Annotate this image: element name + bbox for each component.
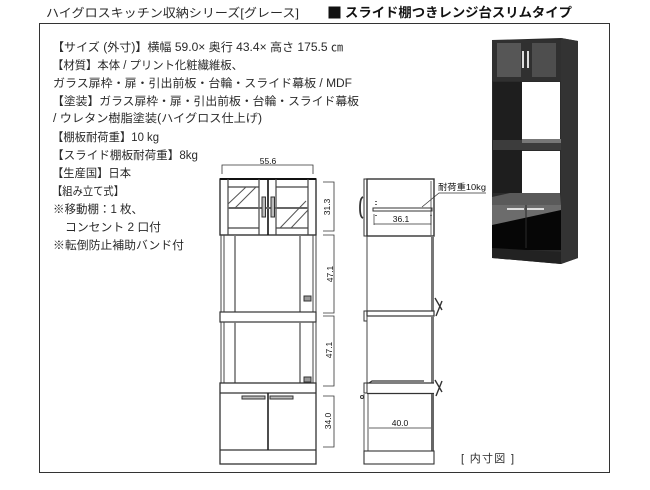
depth dimension [369, 418, 431, 428]
specification text: 【塗装】ガラス扉枠・扉・引出前板・台輪・スライド幕板 [52, 94, 359, 108]
specification text: 【材質】本体 / プリント化粧繊維板、 [52, 58, 243, 72]
width dimension: 55.6 [260, 156, 277, 166]
specification text: ガラス扉枠・扉・引出前板・台輪・スライド幕板 / MDF [53, 76, 352, 90]
series heading: ハイグロスキッチン収納シリーズ[グレース] [46, 5, 299, 20]
front elevation drawing [220, 156, 335, 464]
glossy lower doors [492, 205, 561, 264]
height dimensions: 47.1 [324, 341, 334, 358]
body section [364, 236, 442, 396]
upper cabinet section [360, 179, 434, 236]
upper opening [493, 82, 560, 140]
product type heading [327, 2, 572, 23]
height dimensions [322, 182, 335, 447]
counter [492, 193, 561, 205]
lower cabinet section [360, 381, 434, 464]
height dimensions: 34.0 [323, 412, 333, 429]
product photo [492, 38, 578, 264]
caption: [ 内寸図 ] [461, 451, 514, 465]
specification text: / ウレタン樹脂塗装(ハイグロス仕上げ) [53, 111, 262, 125]
load label [422, 182, 486, 207]
product type heading: スライド棚つきレンジ台スリムタイプ [345, 5, 572, 20]
specification text: コンセント 2 口付 [65, 221, 161, 234]
specification text: 【サイズ (外寸)】横幅 59.0× 奥行 43.4× 高さ 175.5 ㎝ [52, 40, 344, 54]
slide shelf with dimension: 36.1 [393, 214, 410, 224]
specification text: 【棚板耐荷重】10 kg [52, 130, 159, 144]
load label: 耐荷重10kg [438, 182, 486, 192]
specification text: ※転倒防止補助バンド付 [53, 238, 184, 252]
glass doors [492, 40, 561, 81]
height dimensions: 31.3 [322, 198, 332, 215]
width dimension [222, 156, 313, 174]
middle open sections [220, 235, 316, 383]
specification text: 【組み立て式】 [52, 184, 124, 198]
slide shelf with dimension [373, 201, 432, 225]
specification text [52, 40, 359, 252]
upper glass cabinet [220, 179, 316, 235]
shelf [493, 139, 561, 150]
specification text: 【スライド棚板耐荷重】8kg [52, 148, 198, 162]
depth dimension: 40.0 [392, 418, 409, 428]
product type heading: ■ [327, 2, 342, 23]
specification text: 【生産国】日本 [52, 166, 131, 180]
height dimensions: 47.1 [325, 265, 335, 282]
side panel [561, 38, 578, 264]
lower door cabinet [220, 383, 316, 464]
side section drawing [360, 179, 486, 464]
lower opening [493, 150, 560, 193]
specification text: ※移動棚：1 枚、 [53, 202, 143, 216]
